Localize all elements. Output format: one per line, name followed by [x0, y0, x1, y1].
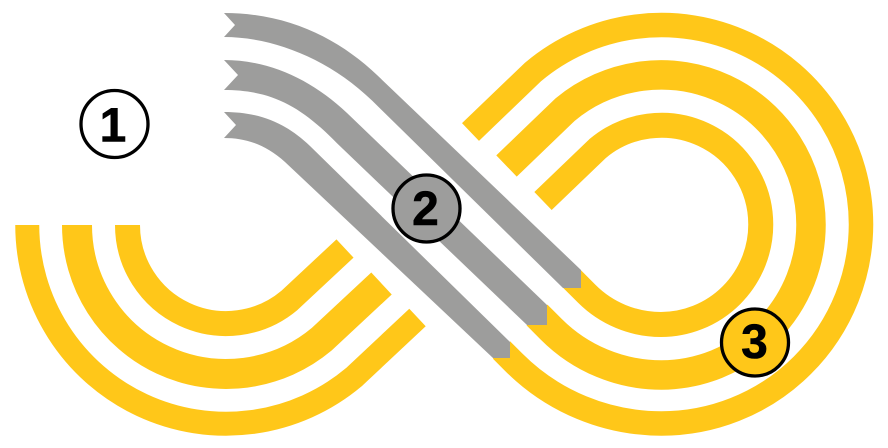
- badge 3: 3: [741, 316, 768, 369]
- left outer band: [27, 225, 418, 424]
- left middle band: [77, 225, 382, 374]
- right yellow loops: [470, 25, 861, 423]
- badge 3: [722, 309, 788, 376]
- right outer loop: [470, 25, 861, 423]
- badge 2: [393, 175, 460, 242]
- badge 1: 1: [100, 100, 126, 152]
- left yellow arcs: [27, 225, 418, 424]
- left inner band: [127, 225, 345, 324]
- grey middle band: [224, 60, 547, 325]
- badge 2: 2: [412, 183, 439, 236]
- grey bottom band: [224, 112, 510, 358]
- grey crossing bands: [224, 13, 581, 358]
- right inner loop: [543, 125, 761, 324]
- grey top band: [224, 13, 581, 288]
- right middle loop: [506, 75, 811, 375]
- badge 1: [81, 90, 148, 158]
